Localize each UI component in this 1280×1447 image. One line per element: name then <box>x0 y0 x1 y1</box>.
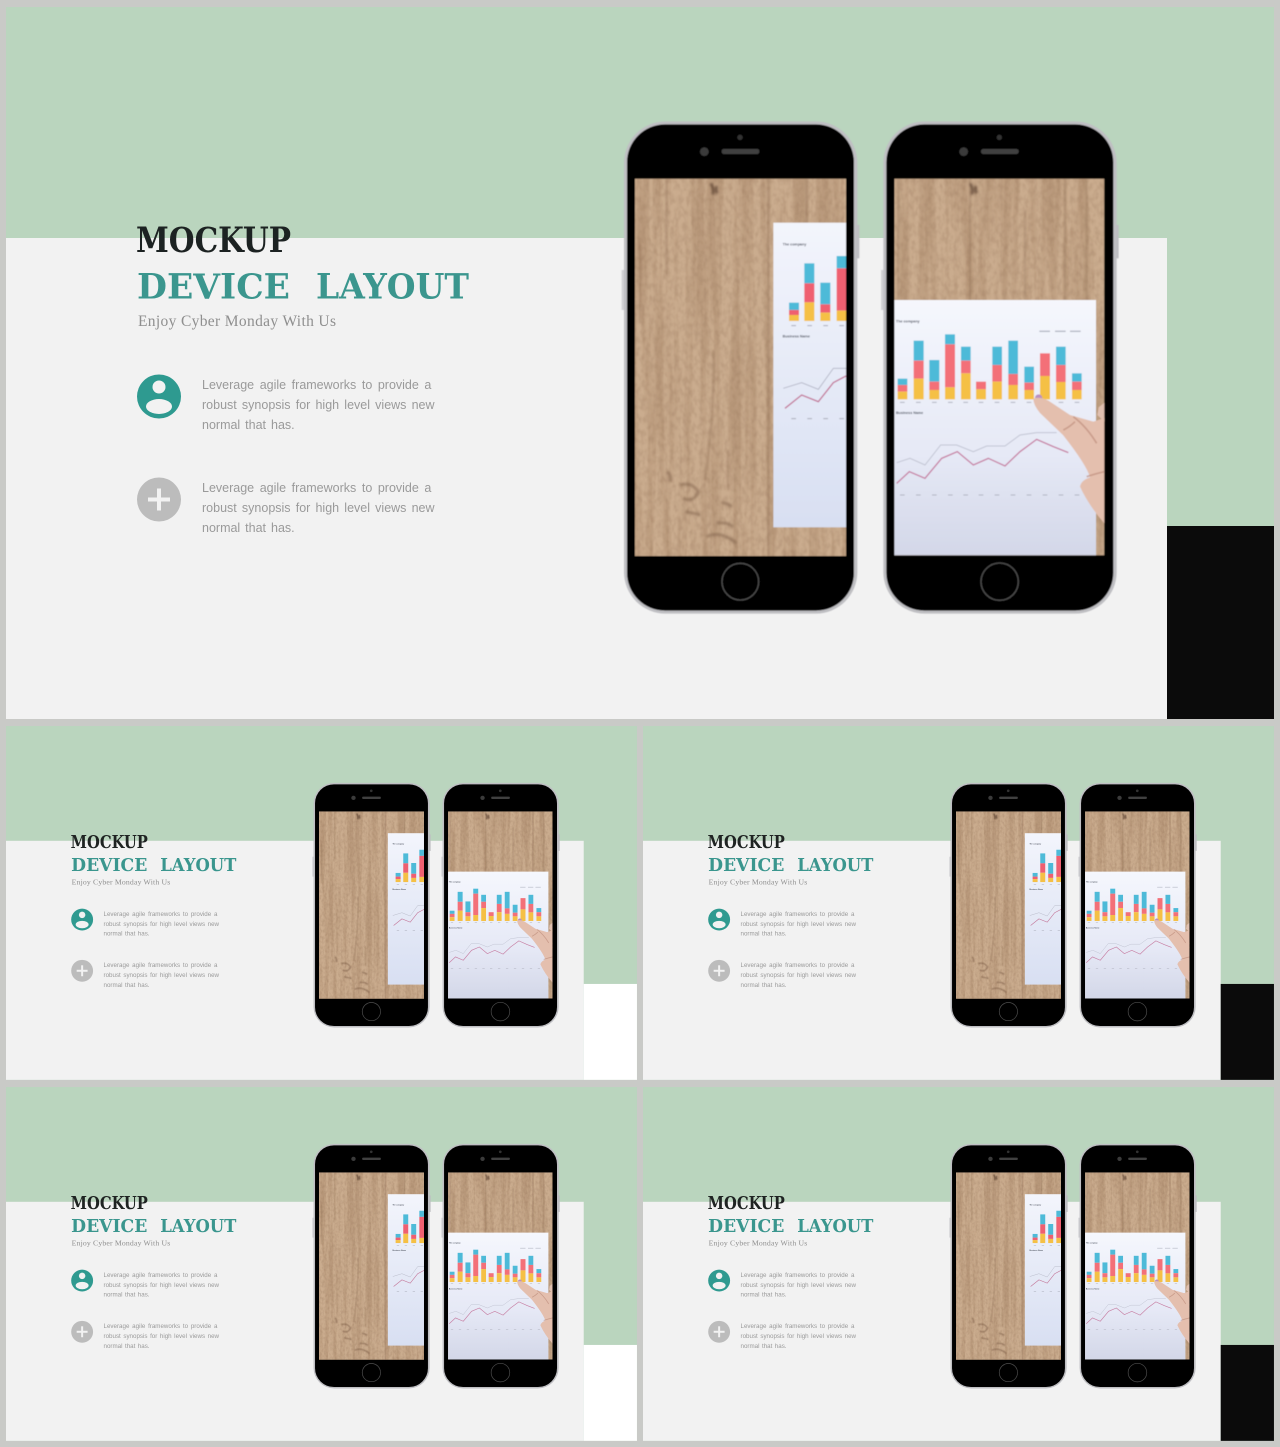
item 2 <box>708 1321 857 1350</box>
panel: light content area <box>6 1202 584 1441</box>
subtitle: Enjoy Cyber Monday With Us <box>709 878 807 887</box>
text block 2 <box>202 481 435 535</box>
home button <box>981 563 1018 600</box>
text block 2 <box>104 962 220 989</box>
panel: green background <box>6 726 637 1080</box>
hand <box>1033 398 1104 523</box>
item 2 <box>137 478 435 535</box>
item 1 <box>708 1270 857 1299</box>
heading block <box>136 220 469 330</box>
phone right <box>881 121 1119 614</box>
text block 2: Leverage agile frameworks to provide a <box>741 962 855 969</box>
screen image: wood and paper <box>635 179 847 556</box>
text block 2: Leverage agile frameworks to provide a <box>104 962 218 969</box>
title: device layout: LAYOUT <box>160 856 236 876</box>
title: device layout: DEVICE <box>137 266 290 308</box>
title: device layout: DEVICE <box>708 1217 784 1237</box>
document: The company <box>783 242 807 246</box>
accent block: black <box>1221 984 1274 1080</box>
title: device layout <box>708 1217 873 1237</box>
accent block: black <box>1167 526 1274 719</box>
text block 2: normal that has. <box>104 1343 150 1350</box>
text block 2 <box>741 1323 857 1350</box>
text block 1: robust synopsis for high level views new <box>741 1282 857 1289</box>
heading block <box>71 833 236 887</box>
title: mockup: MOCKUP <box>708 1194 785 1214</box>
icon: plus <box>71 960 93 982</box>
text block 1 <box>741 911 857 938</box>
text block 1: Leverage agile frameworks to provide a <box>741 1272 855 1279</box>
panel: light content area <box>6 238 1167 719</box>
title: device layout <box>137 266 469 308</box>
title: device layout <box>708 856 873 876</box>
title: device layout <box>71 1217 236 1237</box>
text block 2: normal that has. <box>741 1343 787 1350</box>
text block 1: normal that has. <box>104 1292 150 1299</box>
phones pair <box>949 1144 1197 1389</box>
panel: light content area <box>643 841 1221 1080</box>
text block 1: robust synopsis for high level views new <box>104 921 220 928</box>
title: device layout: DEVICE <box>708 856 784 876</box>
slide 1: large <box>6 7 1274 719</box>
slide 2: small, white accent <box>6 726 637 1080</box>
item 2 <box>71 960 220 989</box>
subtitle: Enjoy Cyber Monday With Us <box>72 878 170 887</box>
icon: plus <box>137 478 181 522</box>
icon: person <box>71 909 93 931</box>
text block 1: normal that has. <box>202 418 295 432</box>
title: device layout: LAYOUT <box>797 856 873 876</box>
phones pair <box>622 121 1119 614</box>
title: mockup: MOCKUP <box>136 220 291 261</box>
text block 1: Leverage agile frameworks to provide a <box>104 911 218 918</box>
panel: green background <box>643 726 1274 1080</box>
title: device layout: LAYOUT <box>316 266 469 308</box>
text block 2 <box>104 1323 220 1350</box>
title: mockup: MOCKUP <box>71 1194 148 1214</box>
text block 1: Leverage agile frameworks to provide a <box>104 1272 218 1279</box>
text block 2: Leverage agile frameworks to provide a <box>741 1323 855 1330</box>
icon: person <box>71 1270 93 1292</box>
text block 2: Leverage agile frameworks to provide a <box>202 481 431 495</box>
heading block <box>708 833 873 887</box>
icon: person <box>708 909 730 931</box>
phones pair <box>312 1144 560 1389</box>
text block 1 <box>104 911 220 938</box>
document with chart: The company <box>896 319 921 323</box>
text block 1: robust synopsis for high level views new <box>104 1282 220 1289</box>
text block 1 <box>202 378 435 432</box>
text block 1: Leverage agile frameworks to provide a <box>202 378 431 392</box>
accent block: black <box>1221 1345 1274 1441</box>
accent block: white <box>584 984 637 1080</box>
text block 2: robust synopsis for high level views new <box>202 501 435 515</box>
icon: plus <box>71 1321 93 1343</box>
icon: plus <box>708 960 730 982</box>
text block 1: normal that has. <box>741 1292 787 1299</box>
panel: green background <box>643 1087 1274 1441</box>
icon: person <box>137 374 181 418</box>
slide 5: small, black accent <box>643 1087 1274 1441</box>
text block 2: normal that has. <box>202 521 295 535</box>
document with chart: Business Name <box>896 411 923 415</box>
slide 3: small, black accent <box>643 726 1274 1080</box>
text block 2: normal that has. <box>104 982 150 989</box>
text block 1: Leverage agile frameworks to provide a <box>741 911 855 918</box>
title: device layout: LAYOUT <box>160 1217 236 1237</box>
document <box>773 223 847 527</box>
phones pair <box>312 783 560 1028</box>
subtitle: Enjoy Cyber Monday With Us <box>709 1239 807 1248</box>
text block 2: robust synopsis for high level views new <box>741 1333 857 1340</box>
title: mockup: MOCKUP <box>71 833 148 853</box>
text block 2: Leverage agile frameworks to provide a <box>104 1323 218 1330</box>
text block 1: robust synopsis for high level views new <box>741 921 857 928</box>
text block 1: normal that has. <box>741 931 787 938</box>
home button <box>722 563 759 600</box>
title: mockup: MOCKUP <box>708 833 785 853</box>
phones pair <box>949 783 1197 1028</box>
text block 2: robust synopsis for high level views new <box>104 972 220 979</box>
document: Business Name <box>783 334 810 338</box>
subtitle: Enjoy Cyber Monday With Us <box>138 313 336 330</box>
title: device layout: DEVICE <box>71 1217 147 1237</box>
panel: green background <box>6 7 1274 719</box>
speaker and camera <box>700 135 759 156</box>
heading block <box>708 1194 873 1248</box>
icon: person <box>708 1270 730 1292</box>
phone left <box>622 121 859 614</box>
text block 1: robust synopsis for high level views new <box>202 398 435 412</box>
text block 1: normal that has. <box>104 931 150 938</box>
document with chart <box>894 300 1096 555</box>
panel: light content area <box>643 1202 1221 1441</box>
text block 2: robust synopsis for high level views new <box>741 972 857 979</box>
screen image: paper and hand <box>894 179 1104 555</box>
panel: light content area <box>6 841 584 1080</box>
title: device layout: DEVICE <box>71 856 147 876</box>
panel: green background <box>6 1087 637 1441</box>
speaker and camera <box>959 135 1019 156</box>
heading block <box>71 1194 236 1248</box>
text block 1 <box>741 1272 857 1299</box>
text block 2 <box>741 962 857 989</box>
item 1 <box>71 1270 220 1299</box>
item 2 <box>708 960 857 989</box>
icon: plus <box>708 1321 730 1343</box>
item 1 <box>137 374 435 432</box>
title: device layout: LAYOUT <box>797 1217 873 1237</box>
item 1 <box>71 909 220 938</box>
text block 1 <box>104 1272 220 1299</box>
slide 4: small, white accent <box>6 1087 637 1441</box>
text block 2: normal that has. <box>741 982 787 989</box>
subtitle: Enjoy Cyber Monday With Us <box>72 1239 170 1248</box>
title: device layout <box>71 856 236 876</box>
item 1 <box>708 909 857 938</box>
item 2 <box>71 1321 220 1350</box>
accent block: white <box>584 1345 637 1441</box>
text block 2: robust synopsis for high level views new <box>104 1333 220 1340</box>
